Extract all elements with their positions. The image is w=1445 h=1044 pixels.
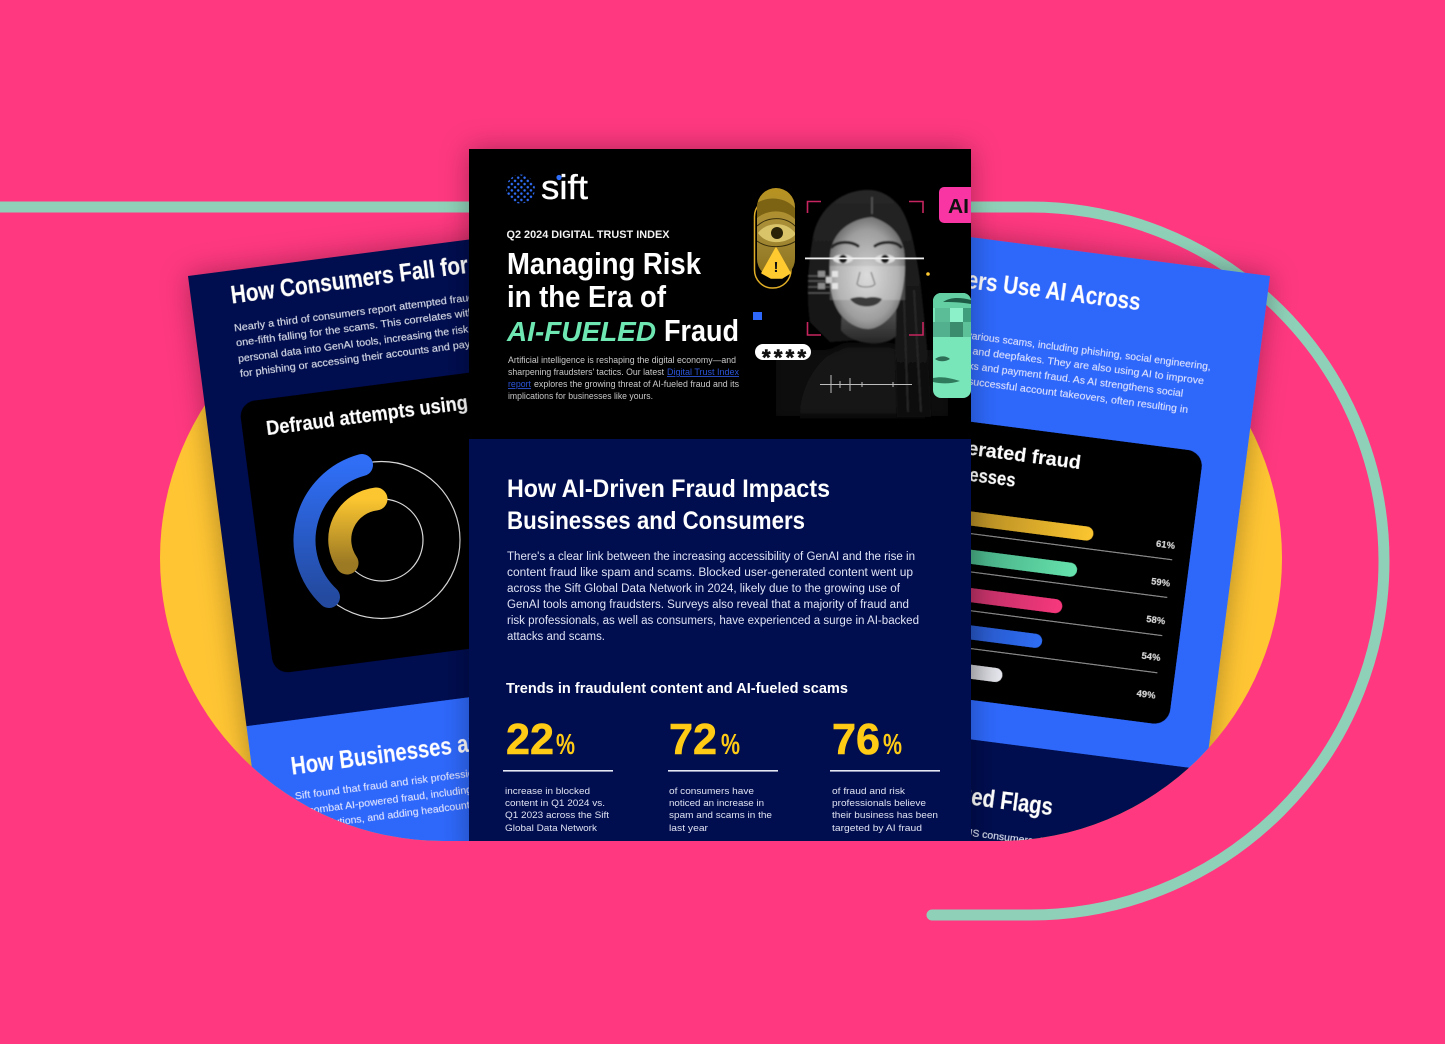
text block: consumers intro: personal data into GenAI tools, increasing the risk xyxy=(237,323,470,365)
panel: left page, consumers xyxy=(174,223,469,841)
scan line xyxy=(805,258,924,259)
stat: 72%: last year xyxy=(669,823,708,834)
icon: yellow dot xyxy=(926,272,930,276)
text block: fraudsters intro xyxy=(971,332,1210,414)
text block: businesses intro xyxy=(295,770,469,824)
title: Fraud xyxy=(664,313,739,348)
bar chart: 61% xyxy=(1155,539,1176,552)
heading: how AI-driven fraud impacts: Businesses and Consumers xyxy=(507,507,805,535)
text block: header intro: report xyxy=(508,379,532,389)
stat: 76%: 76 xyxy=(832,715,880,764)
stat: 76% xyxy=(830,715,940,834)
stat: 72%: % xyxy=(721,729,740,761)
stat: 22%: content in Q1 2024 vs. xyxy=(505,798,605,809)
stat: 76%: % xyxy=(883,729,902,761)
heading: how consumers fall for scams: How Consumers Fall for xyxy=(229,251,470,310)
heading: how AI-driven fraud impacts: How AI-Driven Fraud Impacts xyxy=(507,475,830,503)
text block: consumers intro xyxy=(234,296,469,377)
text block: consumers intro: one-fifth falling for the scams. This correlates with xyxy=(235,306,475,349)
stat: 22%: % xyxy=(556,729,575,761)
text block: fraudsters intro: AI powers various scams, including phishing, social engineering, xyxy=(917,323,1212,373)
text block: businesses intro: Sift found that fraud and risk professionals xyxy=(294,765,494,803)
stat: 72%: spam and scams in the xyxy=(669,810,772,821)
title xyxy=(506,252,738,342)
heading: how AI-driven fraud impacts xyxy=(508,479,830,529)
icon: AI badge: AI xyxy=(948,196,969,218)
text block: main paragraph xyxy=(507,551,919,643)
text block: red flags intro: US consumers, fraud xyxy=(964,826,1064,851)
stat: 22%: Q1 2023 across the Sift xyxy=(505,810,609,821)
bar chart: AI-based tools xyxy=(919,568,952,578)
title: Managing Risk xyxy=(507,246,702,281)
icon: blue square xyxy=(753,312,762,320)
text block: header intro xyxy=(508,355,740,401)
stat: 72% xyxy=(668,715,778,834)
stat: 22%: Global Data Network xyxy=(505,823,597,834)
panel: right page, fraudsters xyxy=(971,220,1284,841)
stat: 76%: targeted by AI fraud xyxy=(832,823,922,834)
stat: 22%: increase in blocked xyxy=(505,786,590,797)
text block: fraudsters intro: synthetic IDs, and deepfakes. They are also using AI to improve xyxy=(906,337,1205,387)
subheading: trends: Trends in fraudulent content and AI-fueled scams xyxy=(506,681,848,697)
text block: header intro: sharpening fraudsters' tactics. Our latest xyxy=(508,367,665,377)
icon: password pill xyxy=(755,344,811,360)
stat: 72%: of consumers have xyxy=(669,786,754,797)
text block: main paragraph: GenAI tools among fraudsters. Surveys also reveal that a majority of fraud and xyxy=(507,599,909,611)
text block: consumers intro: for phishing or accessing their accounts and pay xyxy=(239,338,472,380)
panel: donut chart card xyxy=(240,372,469,672)
text block: main paragraph: risk professionals, as well as consumers, have experienced a surge in AI-backed xyxy=(507,615,919,627)
text block: businesses intro: new solutions, and adding headcount. xyxy=(298,799,473,833)
eyebrow label: Q2 2024 DIGITAL TRUST INDEX xyxy=(506,229,670,241)
stat: 76%: of fraud and risk xyxy=(832,786,905,797)
heading: how businesses are responding: How Businesses are xyxy=(289,727,489,781)
heading: defraud attempts: Defraud attempts using xyxy=(265,392,469,440)
icon: sift logo: sift xyxy=(541,169,589,207)
stat: 22%: 22 xyxy=(506,715,554,764)
chart: waveform line xyxy=(820,375,912,393)
text block: fraudsters intro: engineering, successful account takeovers, often resulting in xyxy=(907,368,1189,416)
bar chart: 59% xyxy=(1150,576,1171,590)
face frame brackets xyxy=(808,202,923,335)
teal swoosh line xyxy=(0,207,1384,915)
text block: consumers intro: Nearly a third of consumers report attempted fraud, xyxy=(233,291,478,334)
icon: sift logo xyxy=(506,174,588,204)
illustration: woman's portrait xyxy=(776,190,948,417)
title: AI-FUELED xyxy=(506,316,656,347)
text block: header intro: implications for businesses like yours. xyxy=(508,391,653,401)
panel: bar chart card xyxy=(971,422,1202,724)
heading: bar chart title: on businesses xyxy=(899,456,1017,492)
text block: main paragraph: content fraud like spam and scams. Blocked user-generated content went up xyxy=(507,567,913,579)
icon: green pixelated face card xyxy=(933,293,971,398)
stat: 72%: 72 xyxy=(669,715,717,764)
bar chart: 54% xyxy=(1141,651,1162,664)
heading: red flags: Raising Red Flags xyxy=(877,771,1055,821)
title: in the Era of xyxy=(507,279,667,314)
heading: fraudsters use AI: How Fraudsters Use AI Across xyxy=(841,250,1142,316)
bar chart: 49% xyxy=(1136,688,1157,702)
text block: main paragraph: across the Sift Global Data Network in 2024, likely due to the growing use of xyxy=(507,583,901,595)
text block: header intro: Digital Trust Index xyxy=(667,367,740,377)
heading: bar chart title xyxy=(971,444,1081,487)
icon: password pill: **** xyxy=(762,345,806,370)
chart: defraud donut xyxy=(303,462,460,618)
text block: header intro: explores the growing threat of AI-fueled fraud and its xyxy=(534,379,740,389)
bar chart: generated by AI tools xyxy=(924,531,971,543)
infographic scene xyxy=(0,132,1390,920)
text block: main paragraph: There's a clear link between the increasing accessibility of GenAI and the rise in xyxy=(507,551,915,563)
stat: 76%: their business has been xyxy=(832,810,938,821)
bar chart xyxy=(971,511,1175,699)
icon: eye capsule with warning xyxy=(754,188,796,288)
document pages clipped to stage xyxy=(174,132,1284,841)
text block: main paragraph: attacks and scams. xyxy=(507,631,605,643)
bar chart: 58% xyxy=(1146,614,1166,627)
icon: eye capsule with warning: ! xyxy=(774,259,778,276)
yellow stadium backdrop xyxy=(160,275,1282,841)
text block: header intro: Artificial intelligence is reshaping the digital economy—and xyxy=(508,355,736,365)
stat: 76%: professionals believe xyxy=(832,798,926,809)
heading: bar chart title: AI-generated fraud xyxy=(905,431,1082,474)
stat: 72%: noticed an increase in xyxy=(669,798,764,809)
text block: businesses intro: to combat AI-powered fraud, including hiring xyxy=(296,780,501,818)
stat: 22% xyxy=(503,715,613,834)
icon: AI badge xyxy=(939,187,971,223)
panel: center page xyxy=(469,149,971,859)
text block: fraudsters intro: chargebacks and payment fraud. As AI strengthens social xyxy=(920,354,1184,400)
